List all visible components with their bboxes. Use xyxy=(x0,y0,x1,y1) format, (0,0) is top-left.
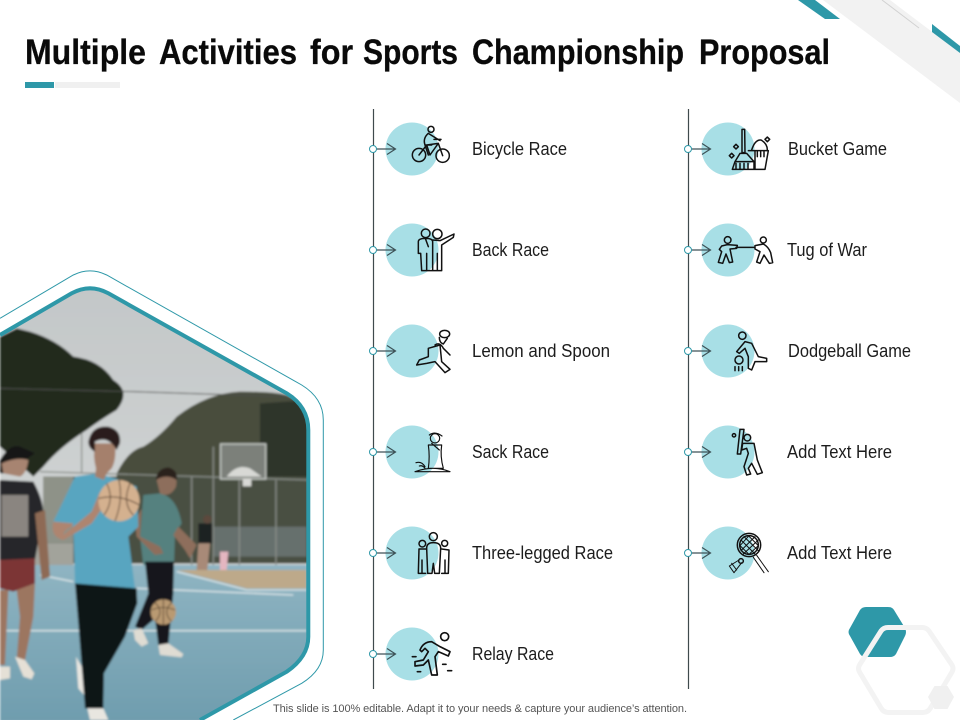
court floor xyxy=(0,565,310,720)
icon: three people xyxy=(418,533,449,573)
item: Lemon and Spoon xyxy=(370,324,610,378)
item: Bucket Game: Bucket Game xyxy=(788,139,887,159)
photo: teens with basketballs on a court, in hexagon frame xyxy=(0,280,310,720)
right timeline line xyxy=(688,109,690,689)
item: Sack Race xyxy=(370,426,549,478)
central person in blue tee xyxy=(53,473,138,588)
top right corner decoration xyxy=(798,0,960,103)
icon: broom and bucket xyxy=(729,129,770,169)
basketball backboard xyxy=(221,444,266,479)
item: Dodgeball Game: Dodgeball Game xyxy=(788,341,911,361)
title: Proposal xyxy=(699,33,830,72)
item: Tug of War: Tug of War xyxy=(787,240,867,260)
photo frame: thick teal hexagon xyxy=(0,288,308,720)
decorative hexagons bottom right xyxy=(848,607,954,712)
item: Add Text Here (badminton) xyxy=(684,526,892,580)
item: Lemon and Spoon: Lemon and Spoon xyxy=(472,341,610,361)
title: for xyxy=(310,33,353,72)
left timeline line xyxy=(372,109,374,689)
item: Three-legged Race xyxy=(370,526,613,580)
item: Relay Race xyxy=(370,628,554,680)
item: Add Text Here (batter): Add Text Here xyxy=(787,442,892,462)
icon: dodgeball player xyxy=(735,332,767,371)
icon: racket and shuttlecock xyxy=(729,533,768,573)
icon: baseball batter xyxy=(732,429,762,475)
large dark tree xyxy=(0,328,123,477)
icon: person in sack xyxy=(415,433,450,472)
icon: two people pointing xyxy=(418,229,454,271)
title underline xyxy=(25,82,120,88)
item: Relay Race: Relay Race xyxy=(472,644,554,664)
item: Bucket Game xyxy=(684,122,887,176)
icon: tug of war xyxy=(718,237,773,263)
item: Tug of War xyxy=(684,224,867,276)
title: Multiple xyxy=(25,33,146,72)
item: Dodgeball Game xyxy=(684,324,911,378)
item: Three-legged Race: Three-legged Race xyxy=(472,543,613,563)
title: Activities xyxy=(159,33,297,72)
person at right in green tee xyxy=(140,493,182,565)
item: Back Race xyxy=(370,224,549,276)
photo frame: thin outer hexagon xyxy=(0,271,323,720)
background figures xyxy=(198,523,212,543)
title: Sports xyxy=(363,33,458,72)
item: Sack Race: Sack Race xyxy=(472,442,549,462)
title xyxy=(25,33,830,72)
person at left in dark tee xyxy=(0,480,43,560)
title: Championship xyxy=(472,33,684,72)
background trees xyxy=(116,390,296,478)
icon: sprinter xyxy=(412,633,452,675)
item: Bicycle Race xyxy=(370,122,567,176)
item: Add Text Here (badminton): Add Text Here xyxy=(787,543,892,563)
footer note: This slide is 100% editable. Adapt it to your needs & capture your audience’s attention. xyxy=(273,703,687,715)
item: Back Race: Back Race xyxy=(472,240,549,260)
icon: running person xyxy=(417,330,450,373)
item: Add Text Here (batter) xyxy=(684,426,892,478)
item: Bicycle Race: Bicycle Race xyxy=(472,139,567,159)
wires and fence xyxy=(0,388,287,397)
icon: cyclist xyxy=(412,126,449,162)
